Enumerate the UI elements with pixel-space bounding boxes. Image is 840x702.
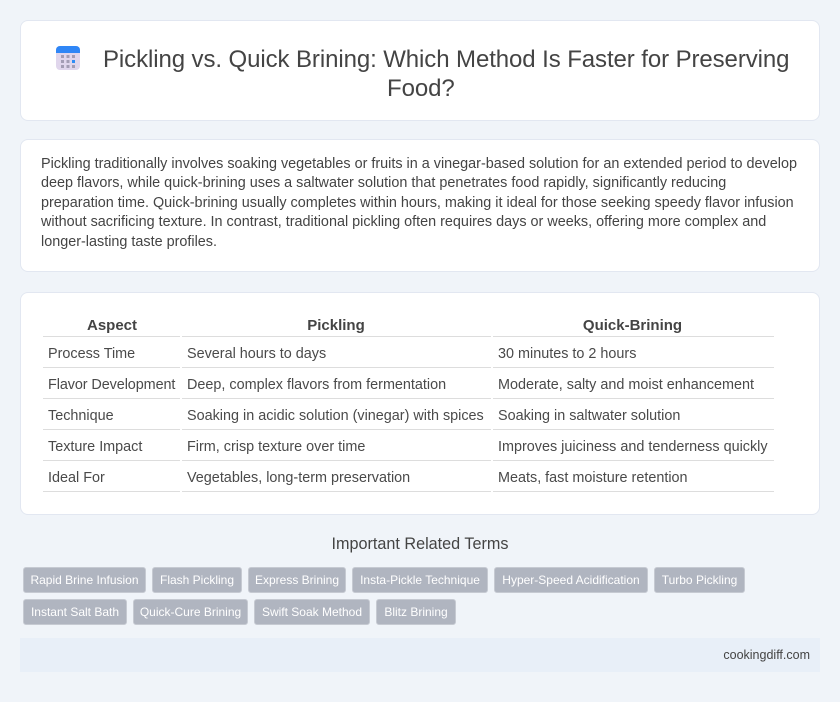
row: ideal for: [48, 470, 688, 486]
row: flavor development: Moderate, salty and moist enhancement: [498, 377, 754, 393]
title: Food?: [387, 75, 455, 102]
tag: [254, 599, 370, 625]
tag: [654, 567, 745, 593]
row: flavor development: Flavor Development: [48, 377, 175, 393]
row: flavor development: [48, 377, 754, 393]
row: technique: Soaking in acidic solution (vinegar) with spices: [187, 408, 484, 424]
footer source text: cookingdiff.com: [723, 648, 810, 662]
tag: Rapid Brine Infusion: [30, 573, 139, 587]
tag: [494, 567, 648, 593]
row: process time: 30 minutes to 2 hours: [498, 346, 636, 362]
footer bar: [20, 638, 820, 672]
panel: intro text card: [20, 139, 820, 272]
comparison table: [43, 317, 774, 492]
panel: comparison table card: [20, 292, 820, 515]
row: process time: [48, 346, 636, 362]
tag: Flash Pickling: [160, 573, 234, 587]
intro paragraph: without sacrificing texture. In contrast, traditional pickling often requires days or weeks, offering more complex and: [41, 214, 766, 230]
row: process time: Process Time: [48, 346, 135, 362]
row: texture impact: [48, 439, 768, 455]
row: texture impact: Improves juiciness and tenderness quickly: [498, 439, 768, 455]
tag: [352, 567, 488, 593]
intro paragraph: preparation time. Quick-brining usually completes within hours, making it ideal for those seeking speedy flavor infusion: [41, 195, 794, 211]
tag: [133, 599, 248, 625]
table header: Pickling: [307, 317, 365, 334]
row: technique: Soaking in saltwater solution: [498, 408, 680, 424]
intro paragraph: [41, 156, 797, 250]
tag: [23, 599, 127, 625]
tag: [23, 567, 146, 593]
tag: [376, 599, 456, 625]
tag: [152, 567, 242, 593]
title: Pickling vs. Quick Brining: Which Method Is Faster for Preserving: [103, 46, 789, 73]
row: texture impact: Texture Impact: [48, 439, 142, 455]
tag: Express Brining: [255, 573, 339, 587]
panel: related term tags: [23, 567, 745, 625]
row: technique: Technique: [48, 408, 114, 424]
tag: [248, 567, 346, 593]
row: ideal for: Meats, fast moisture retention: [498, 470, 688, 486]
tag: Blitz Brining: [384, 605, 448, 619]
icon: calendar: [56, 46, 80, 70]
row: technique: [48, 408, 680, 424]
table header: [87, 317, 682, 334]
row: flavor development: Deep, complex flavors from fermentation: [187, 377, 446, 393]
row: ideal for: Ideal For: [48, 470, 105, 486]
row: process time: Several hours to days: [187, 346, 326, 362]
intro paragraph: Pickling traditionally involves soaking vegetables or fruits in a vinegar-based solution for an extended period to develop: [41, 156, 797, 172]
title: [103, 46, 789, 102]
intro paragraph: deep flavors, while quick-brining uses a saltwater solution that penetrates food rapidly, significantly reducing: [41, 175, 726, 191]
panel: title card: [20, 20, 820, 121]
tag: Turbo Pickling: [662, 573, 737, 587]
tag: Swift Soak Method: [262, 605, 362, 619]
heading: related terms: Important Related Terms: [332, 535, 508, 553]
table header: Quick-Brining: [583, 317, 682, 334]
tag: Quick-Cure Brining: [140, 605, 241, 619]
tag: Instant Salt Bath: [31, 605, 119, 619]
intro paragraph: longer-lasting taste profiles.: [41, 234, 217, 250]
tag: Hyper-Speed Acidification: [502, 573, 640, 587]
row: texture impact: Firm, crisp texture over time: [187, 439, 365, 455]
tag: Insta-Pickle Technique: [360, 573, 480, 587]
row: ideal for: Vegetables, long-term preservation: [187, 470, 410, 486]
table header: Aspect: [87, 317, 137, 334]
